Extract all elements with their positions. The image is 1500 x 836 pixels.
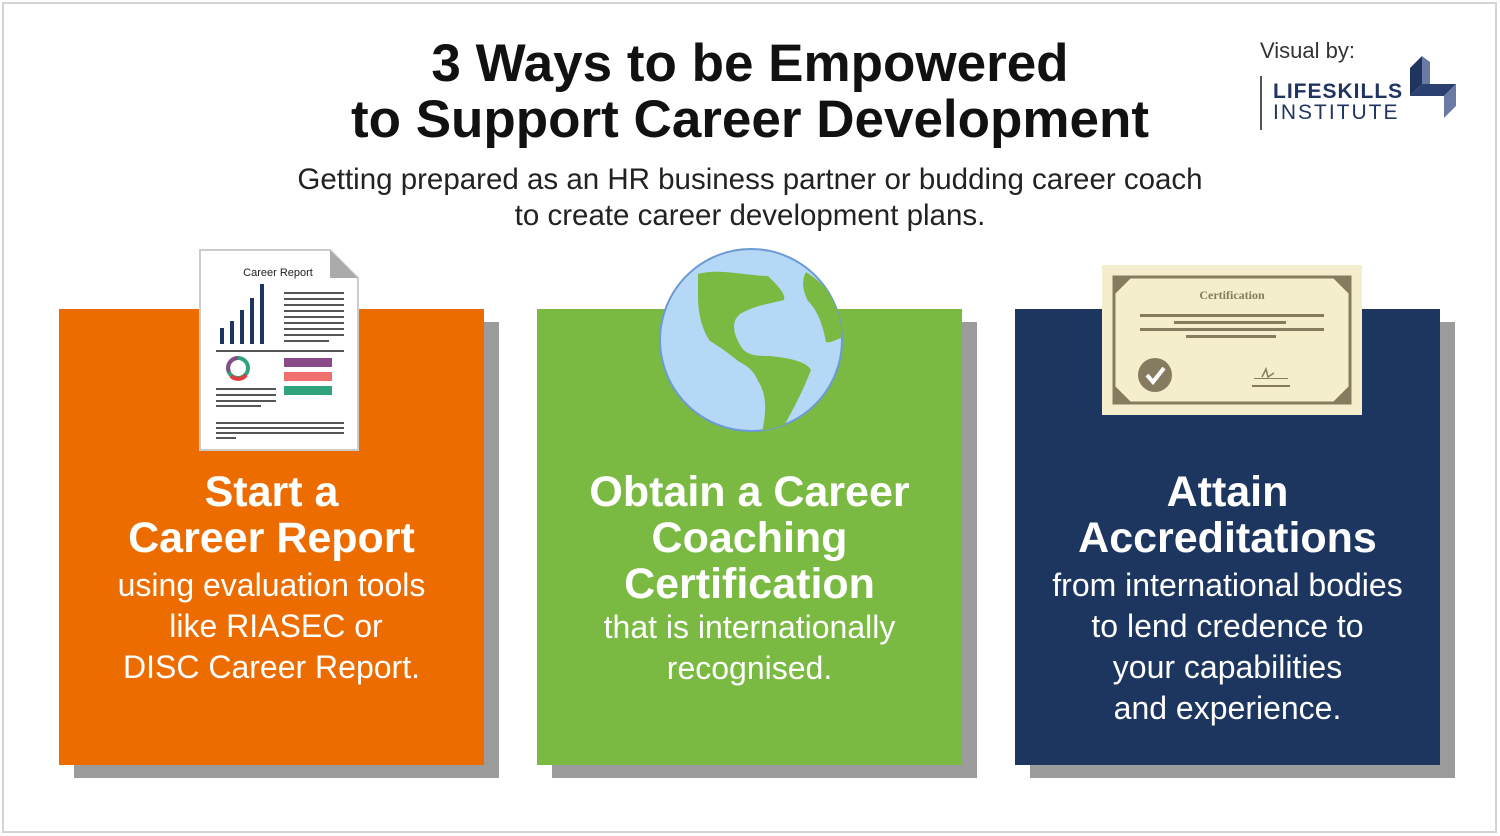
panel: coaching certification xyxy=(537,309,962,765)
icon: globe xyxy=(659,248,843,432)
panel: coaching certification: Obtain a Career xyxy=(589,468,910,516)
panel: coaching certification: recognised. xyxy=(667,650,832,686)
panel: accreditations xyxy=(1015,309,1440,765)
text: DISC Career Report. xyxy=(123,649,420,685)
title xyxy=(351,34,1149,149)
panel: coaching certification: that is internationally xyxy=(604,609,895,645)
panel: coaching certification: Coaching xyxy=(652,514,847,562)
heading xyxy=(128,468,415,562)
text: using evaluation tools xyxy=(118,567,425,603)
icon: certificate: Certification xyxy=(1199,288,1265,302)
heading: Career Report xyxy=(128,514,415,562)
panel: accreditations: and experience. xyxy=(1114,690,1341,726)
logo: lifeskills institute: Visual by: xyxy=(1260,38,1355,63)
panel: accreditations: to lend credence to xyxy=(1091,608,1364,644)
heading: Start a xyxy=(205,468,338,516)
panel: accreditations: your capabilities xyxy=(1113,649,1342,685)
subtitle xyxy=(297,163,1203,232)
panel: coaching certification: Certification xyxy=(624,560,875,608)
logo: lifeskills institute: LIFESKILLS xyxy=(1273,80,1403,103)
panel: career report xyxy=(59,309,484,765)
panel: accreditations: Attain xyxy=(1167,468,1288,516)
title: 3 Ways to be Empowered xyxy=(431,34,1069,93)
logo: lifeskills institute: INSTITUTE xyxy=(1273,101,1400,124)
shadows xyxy=(74,322,499,778)
title: to Support Career Development xyxy=(351,90,1149,149)
icon: career report document xyxy=(199,249,359,451)
subtitle: Getting prepared as an HR business partner or budding career coach xyxy=(297,163,1203,196)
panel: accreditations: Accreditations xyxy=(1078,514,1377,562)
subtitle: to create career development plans. xyxy=(515,199,985,232)
text: like RIASEC or xyxy=(169,608,383,644)
text xyxy=(118,567,425,685)
icon: career report document: Career Report xyxy=(243,267,313,279)
panel: accreditations: from international bodies xyxy=(1052,567,1403,603)
icon: certificate xyxy=(1102,265,1362,415)
logo: lifeskills institute xyxy=(1260,38,1456,130)
